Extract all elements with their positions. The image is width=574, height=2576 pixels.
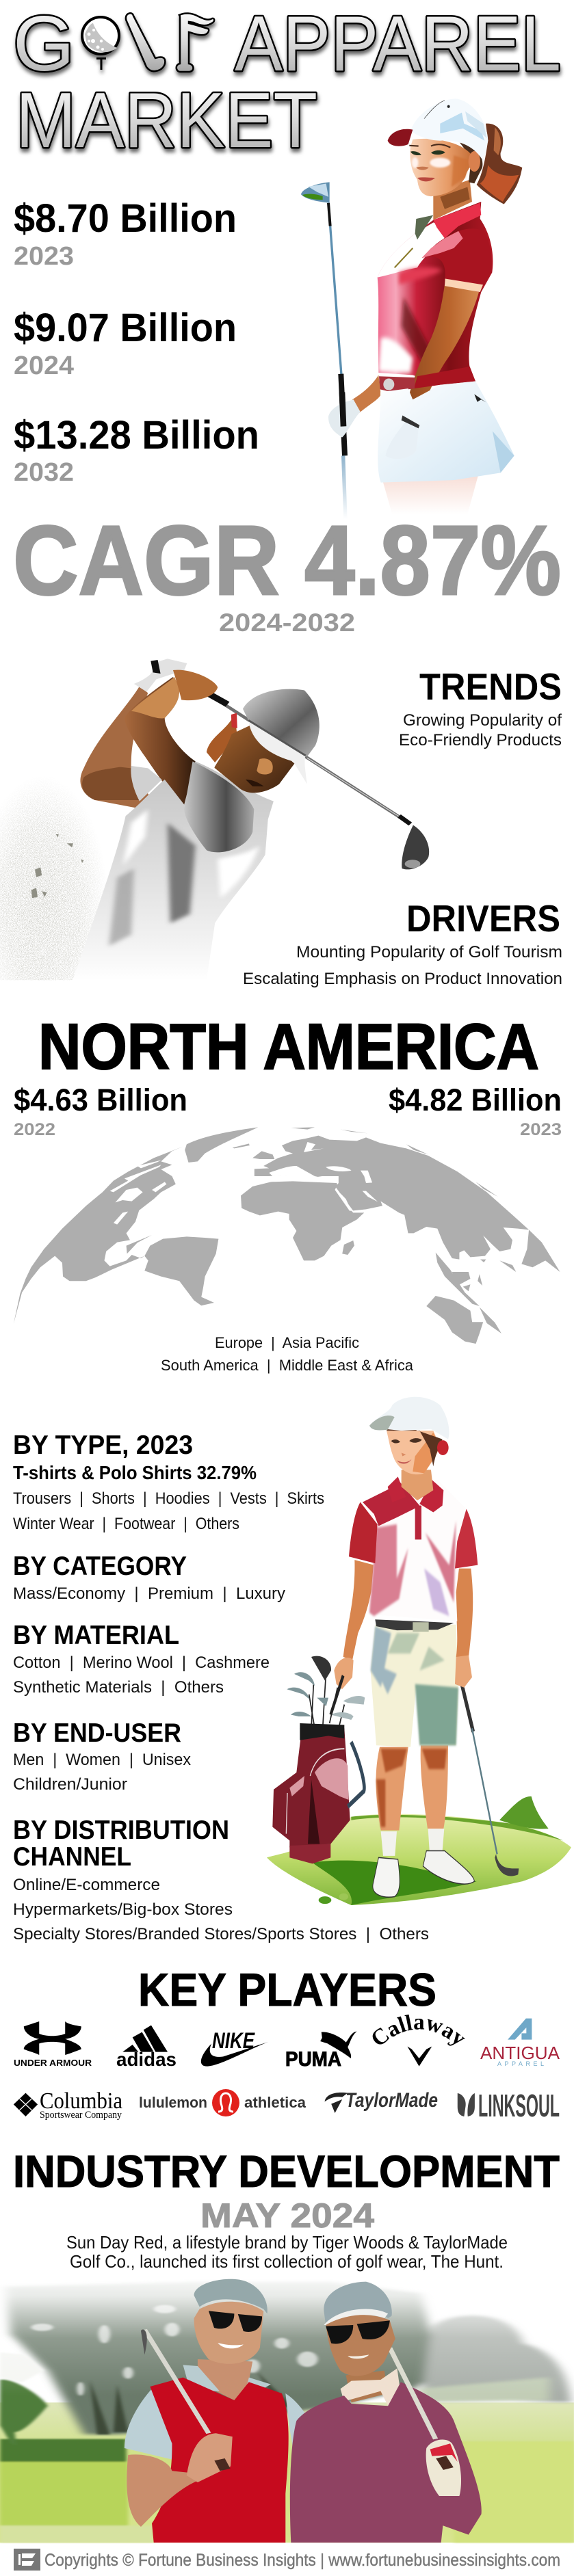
club heads	[287, 1656, 365, 1720]
near hedge and tree	[0, 2380, 574, 2542]
left glove	[328, 399, 361, 438]
boy eyes, nose and mouth	[391, 1438, 422, 1463]
right golfer neck	[346, 2371, 388, 2402]
segment: by end-user: Men | Women | Unisex	[13, 1751, 191, 1769]
logo: Under Armour: UNDER ARMOUR	[14, 2058, 92, 2068]
knee shading	[376, 1749, 447, 1827]
stat: 2023 market size	[14, 196, 237, 271]
left golfer red vest	[150, 2378, 289, 2542]
regional stat 2022: 2022	[14, 1120, 55, 1139]
logo: Columbia Sportswear: Sportswear Company	[40, 2110, 122, 2121]
logo: Columbia Sportswear: Columbia	[40, 2088, 122, 2114]
left sleeve	[131, 766, 162, 801]
logo: Puma	[285, 2032, 357, 2071]
tree trunks and foliage gaps	[0, 2305, 317, 2434]
cap	[243, 689, 319, 757]
bag base	[289, 1844, 330, 1863]
segment: by distribution channel	[13, 1816, 429, 1943]
regional stat 2023: $4.82 Billion	[389, 1083, 562, 1117]
logo: Antigua Apparel: APPAREL	[497, 2060, 544, 2067]
clubs in bag	[309, 1671, 344, 1728]
waist band and belt	[414, 367, 475, 388]
segment: by type: Trousers | Shorts | Hoodies | Vests | Skirts	[13, 1489, 324, 1508]
cap	[369, 1397, 449, 1439]
grass tuft	[499, 1796, 549, 1829]
drivers heading: DRIVERS	[406, 897, 560, 940]
putter club	[462, 1684, 519, 1876]
trends text: Eco-Friendly Products	[399, 731, 562, 749]
logo: Antigua Apparel	[480, 2019, 560, 2067]
grass patch	[267, 1814, 571, 1905]
title letter G: G	[13, 1, 75, 88]
right leg	[421, 1745, 448, 1829]
white skirt	[378, 381, 514, 483]
ear	[437, 1440, 449, 1455]
golf bag body	[272, 1728, 350, 1847]
segment: by distribution channel: Online/E-commerce	[13, 1876, 160, 1894]
segment: by material: Synthetic Materials | Others	[13, 1678, 224, 1697]
Europe and Asia	[255, 1136, 529, 1260]
stat: 2032 market size	[14, 413, 259, 487]
segment: by type: Winter Wear | Footwear | Others	[13, 1515, 239, 1533]
segment: by type	[13, 1431, 324, 1533]
left golfer hand	[187, 2433, 233, 2482]
drivers text	[243, 943, 562, 988]
face	[410, 139, 473, 196]
shirt folds	[109, 809, 259, 946]
segment: by material: BY MATERIAL	[13, 1621, 179, 1650]
CAGR period: 2024-2032	[219, 609, 355, 637]
illustration: boy golfer with bag on green	[267, 1397, 571, 1905]
other regions list: South America | Middle East & Africa	[161, 1357, 414, 1374]
segment: by category: BY CATEGORY	[13, 1552, 187, 1581]
near arm	[125, 677, 196, 805]
eyes, brows, nose and mouth	[409, 144, 450, 181]
cap crown	[410, 98, 488, 161]
left golfer sunglasses	[209, 2311, 262, 2332]
grass blobs	[319, 1894, 348, 1904]
cap visor	[388, 129, 413, 146]
regional stat 2022: $4.63 Billion	[14, 1083, 187, 1117]
left golfer face	[194, 2302, 263, 2364]
left golfer smile	[218, 2343, 244, 2348]
right arm	[456, 1569, 473, 1657]
photo: two golfers on course	[0, 2268, 574, 2542]
regional stat 2022	[14, 1083, 187, 1139]
Australia	[426, 1296, 483, 1344]
fairway	[0, 2402, 574, 2542]
neck	[433, 180, 472, 220]
stat: 2023 market size: 2023	[14, 242, 74, 271]
hair	[387, 1424, 443, 1466]
driver club	[301, 182, 345, 519]
trends text	[399, 711, 562, 749]
world map	[14, 1127, 560, 1344]
trends text: Growing Popularity of	[403, 711, 562, 730]
footer	[14, 2549, 560, 2571]
segment: by distribution channel: Specialty Stores/Branded Stores/Sports Stores | Others	[13, 1925, 429, 1943]
logo: Columbia Sportswear	[14, 2088, 122, 2121]
segment: by distribution channel: Hypermarkets/Big-box Stores	[13, 1900, 233, 1919]
logo: Lululemon Athletica: lululemon	[139, 2094, 207, 2111]
shirt body	[73, 761, 274, 981]
stat: 2024 market size	[14, 306, 237, 380]
right arm and sleeve cuff	[404, 284, 479, 424]
title word MARKET: MARKET	[16, 77, 317, 164]
segment: by material: Cotton | Merino Wool | Cashmere	[13, 1654, 270, 1672]
right golfer sunglasses	[326, 2320, 390, 2343]
Eurasia water cutouts	[269, 1142, 378, 1211]
Africa	[241, 1181, 364, 1260]
dust chunks	[31, 834, 83, 898]
segment: by category: Mass/Economy | Premium | Luxury	[13, 1584, 285, 1603]
left golfer sleeves	[125, 2389, 306, 2460]
logo: Adidas: adidas	[116, 2049, 177, 2070]
segment: by end-user	[13, 1718, 191, 1794]
logo: TaylorMade: TaylorMade	[345, 2089, 438, 2112]
right golfer glove	[426, 2439, 461, 2496]
left shoe	[373, 1857, 400, 1897]
grass shadow	[313, 1861, 477, 1905]
left golfer neck	[198, 2359, 252, 2400]
development date: MAY 2024	[200, 2196, 374, 2235]
regional stat 2023: 2023	[520, 1120, 562, 1139]
white shirt highlight	[378, 222, 454, 278]
left forearm	[352, 375, 381, 413]
Greenland	[185, 1127, 258, 1163]
right glove	[385, 421, 419, 459]
placket	[415, 1506, 421, 1539]
shirt shoulder shading	[422, 228, 492, 290]
logo: Callaway	[372, 2015, 465, 2067]
segment: by distribution channel: BY DISTRIBUTION	[13, 1816, 229, 1845]
logo: Lululemon Athletica	[139, 2089, 306, 2116]
stat: 2024 market size: $9.07 Billion	[14, 306, 237, 350]
shirt watercolor	[369, 1521, 456, 1616]
icon: flag as letter F	[177, 13, 214, 72]
logo: Linksoul	[458, 2088, 560, 2123]
icon: golf ball as letter O	[82, 17, 119, 70]
logo: Under Armour	[14, 2021, 92, 2068]
golf club shaft and head	[205, 692, 429, 869]
other regions list: Europe | Asia Pacific	[215, 1334, 359, 1351]
bag top rim	[300, 1723, 344, 1740]
legs fading out	[380, 473, 479, 514]
stat: 2032 market size: $13.28 Billion	[14, 413, 259, 457]
left sleeve	[349, 1502, 378, 1563]
South America	[144, 1236, 218, 1305]
collar	[388, 1476, 443, 1513]
gloved hand	[134, 659, 187, 692]
far arm	[80, 686, 151, 808]
title: Golf Apparel Market	[13, 1, 561, 164]
stat: 2032 market size: 2032	[14, 458, 74, 487]
development description: Golf Co., launched its first collection of golf wear, The Hunt.	[70, 2251, 504, 2272]
logo: Lululemon Athletica: athletica	[244, 2094, 306, 2111]
bag highlights	[289, 1758, 348, 1800]
logo: Puma: PUMA	[285, 2048, 341, 2071]
segment: by category	[13, 1552, 285, 1603]
trees background	[5, 2282, 571, 2434]
regional stat 2023	[389, 1083, 562, 1139]
cheek highlights	[412, 155, 470, 187]
neck and face	[215, 725, 294, 793]
right golfer club	[390, 2348, 436, 2439]
illustration: female golfer swinging, monochrome	[0, 659, 429, 981]
trends heading: TRENDS	[419, 665, 562, 708]
segment: by end-user: BY END-USER	[13, 1718, 181, 1748]
shirt collar	[433, 203, 481, 239]
grass top edge	[351, 1815, 563, 1841]
United Kingdom and Ireland	[252, 1151, 274, 1159]
right golfer cap	[324, 2282, 392, 2325]
hands	[334, 1655, 472, 1689]
right golfer sweater	[290, 2382, 482, 2542]
logo: Antigua Apparel: ANTIGUA	[480, 2043, 560, 2063]
segment: by type: BY TYPE, 2023	[13, 1431, 193, 1460]
fist	[173, 670, 218, 700]
North America water cutouts	[109, 1160, 166, 1225]
segment: by distribution channel: CHANNEL	[13, 1842, 131, 1872]
shirt body	[361, 1476, 467, 1621]
stat: 2024 market size: 2024	[14, 351, 74, 380]
ponytail	[477, 124, 522, 204]
Caribbean islands	[127, 1235, 152, 1253]
footer logo	[14, 2549, 40, 2571]
illustration: woman golfer with driver	[301, 98, 522, 519]
segment: by type: T-shirts & Polo Shirts 32.79%	[13, 1462, 257, 1483]
left leg	[376, 1747, 408, 1831]
socks	[381, 1829, 444, 1857]
logo: Adidas	[116, 2026, 177, 2070]
grip in hand	[330, 1675, 343, 1715]
belt	[375, 1619, 454, 1630]
left arm	[343, 1560, 374, 1660]
stat: 2023 market size: $8.70 Billion	[14, 196, 237, 241]
shirt soft folds	[378, 267, 443, 373]
development description	[66, 2232, 508, 2272]
left golfer collar	[183, 2365, 271, 2400]
Japan and east Asian islands	[436, 1230, 560, 1306]
Iceland and arctic islands	[233, 1127, 498, 1197]
neck	[402, 1470, 433, 1500]
hair and hair tie	[207, 713, 237, 762]
right sleeve	[455, 1509, 478, 1569]
dark hair	[458, 141, 482, 183]
logo: Nike: NIKE	[212, 2028, 255, 2053]
left golfer cap	[194, 2279, 268, 2313]
logo: TaylorMade	[325, 2089, 438, 2113]
ear	[469, 151, 480, 172]
sky fade	[0, 2268, 574, 2395]
North America	[14, 1147, 183, 1324]
segment: by material	[13, 1621, 270, 1697]
drivers text: Mounting Popularity of Golf Tourism	[296, 943, 562, 961]
drivers text: Escalating Emphasis on Product Innovation	[243, 970, 562, 988]
left golfer club	[144, 2330, 209, 2433]
bag strap	[348, 1742, 364, 1807]
key players heading: KEY PLAYERS	[138, 1964, 436, 2016]
left golfer arm	[127, 2454, 200, 2527]
Indonesian islands	[452, 1260, 501, 1333]
Madagascar	[342, 1240, 354, 1255]
right golfer smile	[348, 2354, 369, 2359]
club grip over glove	[342, 393, 343, 427]
shorts	[371, 1625, 458, 1747]
cap visor	[248, 720, 307, 784]
development description: Sun Day Red, a lifestyle brand by Tiger Woods & TaylorMade	[66, 2232, 508, 2253]
other regions list	[161, 1334, 414, 1374]
right golfer collar	[341, 2368, 400, 2406]
regional heading: North America: NORTH AMERICA	[38, 1011, 539, 1083]
icon: golf club as letter L	[126, 13, 165, 71]
logo: Nike	[201, 2028, 268, 2067]
left golfer	[125, 2279, 306, 2542]
segment: by end-user: Children/Junior	[13, 1775, 127, 1794]
shirt yoke	[363, 1478, 419, 1526]
right golfer face	[326, 2315, 395, 2376]
right golfer	[290, 2282, 482, 2542]
right shoe	[423, 1850, 474, 1884]
face	[387, 1431, 440, 1474]
shorts watercolor shading	[371, 1626, 458, 1745]
right sleeve	[184, 761, 254, 852]
shirt	[378, 202, 493, 385]
logo: Callaway: Callaway	[372, 2015, 465, 2046]
dust particles	[0, 745, 120, 980]
